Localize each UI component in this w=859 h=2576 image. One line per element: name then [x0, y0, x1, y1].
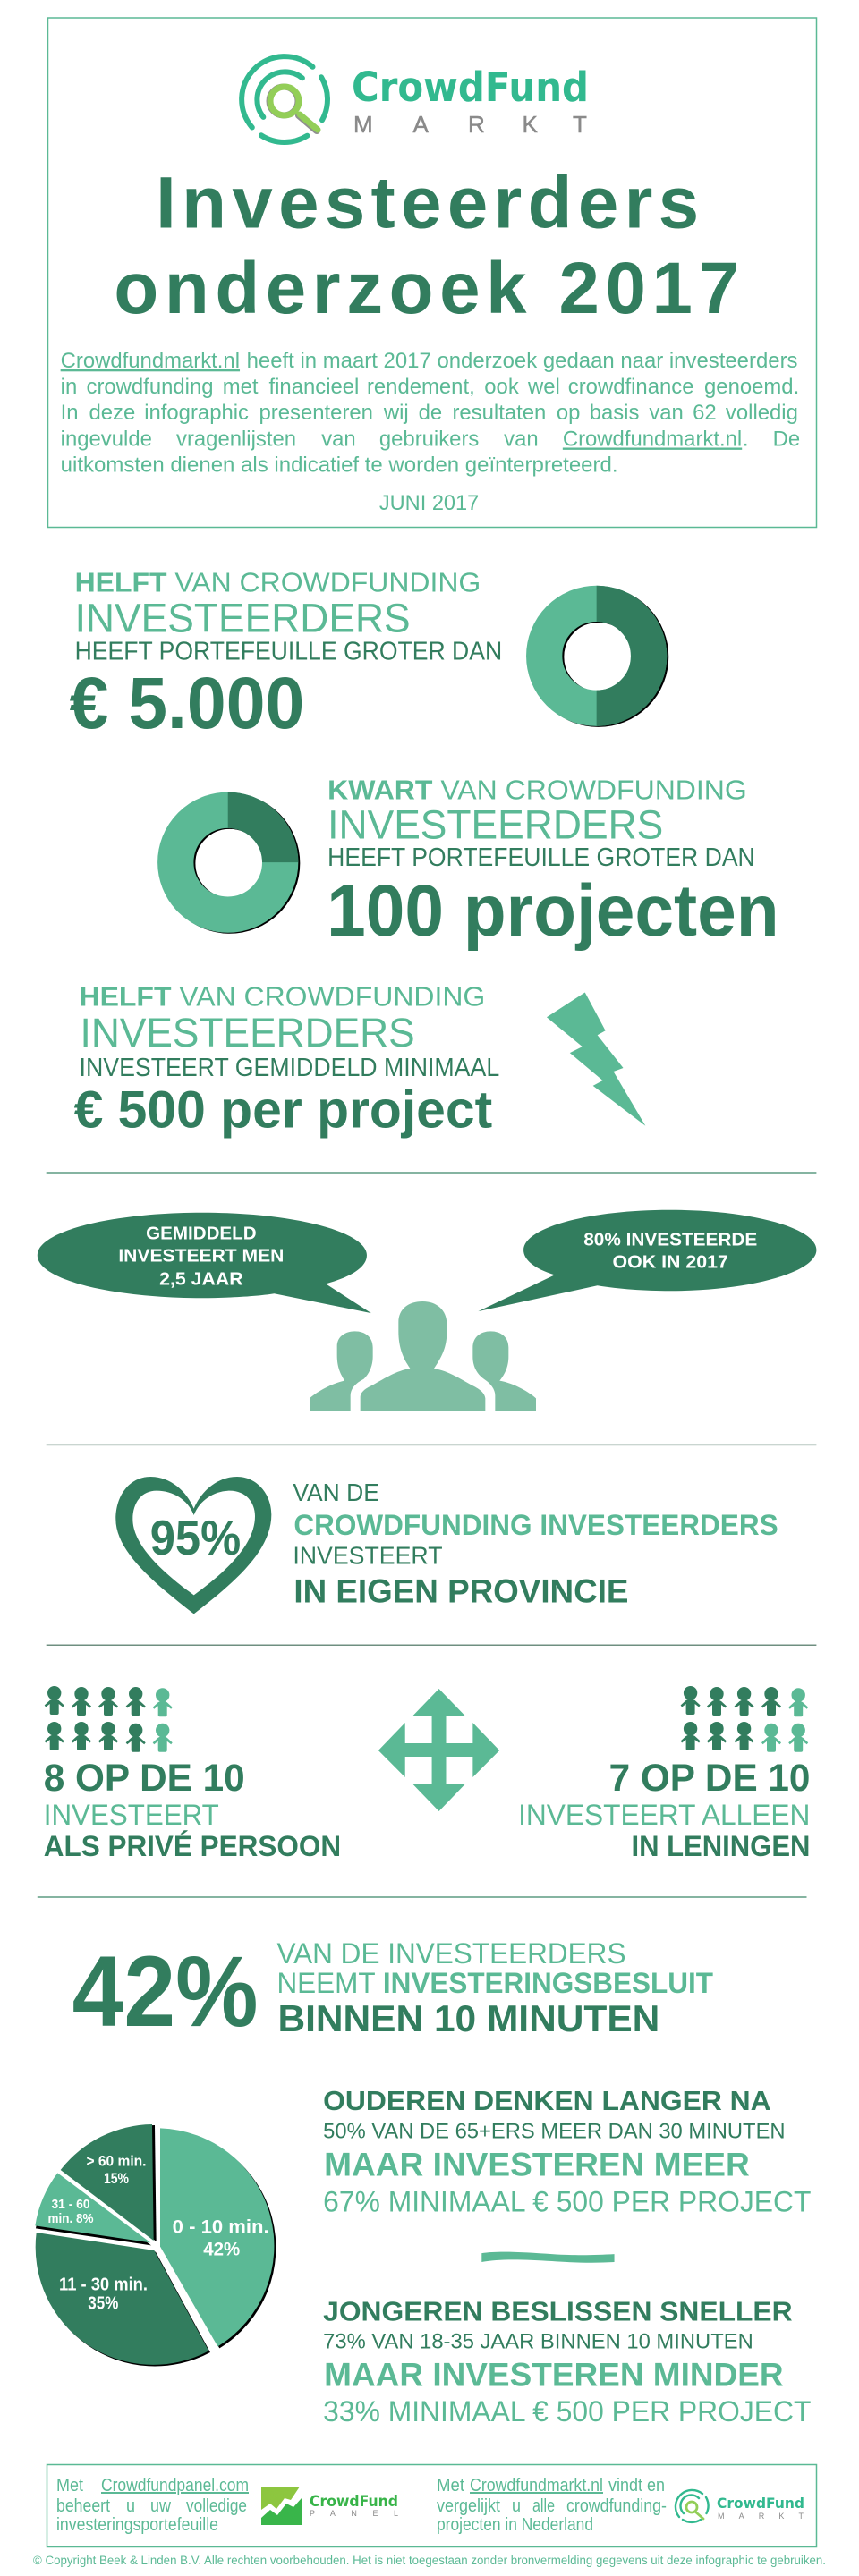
logo: CrowdFund Panel: [261, 2487, 398, 2525]
slice label 31-60: 31 - 60: [52, 2197, 89, 2212]
percentage: 95%: [150, 1510, 241, 1565]
panel: 500 per project: [74, 980, 645, 1140]
panel: loans: [518, 1686, 810, 1862]
heading: INVESTEERT GEMIDDELD MINIMAAL: [80, 1054, 499, 1082]
text block: CROWDFUNDING INVESTEERDERS: [293, 1508, 778, 1541]
text block: [293, 1479, 778, 1610]
text block: younger investors: [323, 2296, 811, 2428]
speech bubble right: 80% INVESTEERDE: [583, 1231, 757, 1250]
text block: older investors: MAAR INVESTEREN MEER: [324, 2147, 750, 2183]
heading: INVESTEERDERS: [81, 1010, 415, 1055]
logo: CrowdFund Markt small: MARKT: [718, 2512, 804, 2521]
intro text: wel: [527, 375, 560, 399]
intro text: Crowdfundmarkt.nl: [563, 427, 742, 451]
intro text: gebruikers: [379, 427, 479, 451]
text: crowdfundpanel: [56, 2476, 249, 2535]
big number: 100 projecten: [327, 870, 779, 952]
stat text: INVESTEERT ALLEEN: [518, 1799, 810, 1831]
intro text: [61, 349, 800, 477]
intro text: infographic: [144, 401, 249, 425]
date: JUNI 2017: [379, 491, 479, 515]
logo: CrowdFund Markt: [242, 56, 589, 142]
intro text: crowdfunding: [87, 375, 214, 399]
heading: HEEFT PORTEFEUILLE GROTER DAN: [327, 843, 755, 872]
slice label 31-60: [48, 2197, 93, 2226]
heading: INVESTEERDERS: [75, 595, 411, 640]
slice label 11-30: [59, 2275, 148, 2314]
stat text: [44, 1757, 341, 1862]
text: crowdfundmarkt: [437, 2476, 667, 2535]
icon: heart: [115, 1477, 271, 1614]
intro text: uitkomsten dienen als indicatief te worden geïnterpreteerd.: [61, 453, 618, 477]
intro text: deze: [89, 401, 135, 425]
stat text: 8 OP DE 10: [44, 1757, 245, 1800]
text block: younger investors: MAAR INVESTEREN MINDER: [324, 2356, 784, 2393]
icon: lightning bolt: [547, 992, 645, 1126]
stat text: IN LENINGEN: [631, 1830, 810, 1862]
text: crowdfundmarkt: alle: [532, 2496, 555, 2516]
speech bubble left: INVESTEERT MEN: [118, 1246, 284, 1266]
intro text: volledig: [726, 401, 798, 425]
intro text: vragenlijsten: [176, 427, 296, 451]
intro text: financieel: [268, 375, 359, 399]
speech bubble left: [38, 1213, 371, 1313]
slice label over 60: 15%: [104, 2171, 129, 2187]
heading: KWART VAN CROWDFUNDING: [327, 775, 747, 806]
heading: HEEFT PORTEFEUILLE GROTER DAN: [75, 637, 502, 665]
wave divider: [481, 2252, 615, 2263]
big percentage: 42%: [72, 1936, 259, 2047]
icon: people 7 of 10: [681, 1686, 808, 1752]
text block: IN EIGEN PROVINCIE: [293, 1573, 628, 1610]
title: Investeerders: [156, 163, 699, 244]
slice label 0-10: 42%: [203, 2239, 240, 2260]
panel: portfolio 5000: [70, 567, 651, 744]
title: [114, 163, 739, 329]
slice label 31-60: min. 8%: [48, 2211, 93, 2226]
intro text: crowdfinance: [568, 375, 693, 399]
logo: CrowdFund Panel: PANEL: [310, 2509, 398, 2518]
intro text: op: [557, 401, 580, 425]
intro text: presenteren: [259, 401, 373, 425]
intro text: 62: [693, 401, 717, 425]
panel: footer: [47, 2465, 816, 2547]
logo: CrowdFund Markt: MARKT: [353, 111, 587, 138]
intro text: van: [649, 401, 684, 425]
intro text: van: [321, 427, 356, 451]
intro text: De: [773, 427, 800, 451]
intro text: met: [223, 375, 259, 399]
intro text: .: [743, 427, 748, 451]
text: crowdfundmarkt: vindt en: [608, 2476, 665, 2496]
big amount: € 5.000: [70, 663, 304, 744]
text: crowdfundpanel: investeringsportefeuille: [56, 2515, 218, 2535]
panel: header: [48, 18, 816, 528]
logo: CrowdFund Markt small: CrowdFund: [717, 2495, 804, 2512]
text block: younger investors: 33% MINIMAAL € 500 PER PROJECT: [323, 2394, 811, 2428]
heading: HELFT VAN CROWDFUNDING: [75, 567, 481, 598]
stat text: [518, 1757, 810, 1862]
panel: own province: [115, 1477, 778, 1614]
intro text: heeft in maart 2017 onderzoek gedaan naar investeerders: [247, 349, 798, 373]
panel: decision time: [72, 1936, 713, 2047]
text: crowdfundpanel: beheert: [56, 2496, 110, 2516]
heading: [327, 775, 755, 872]
intro text: rendement,: [367, 375, 475, 399]
intro text: wij: [383, 401, 409, 425]
text: crowdfundmarkt: vergelijkt: [437, 2496, 500, 2516]
text: crowdfundpanel: Crowdfundpanel.com: [101, 2476, 249, 2496]
heading: INVESTEERDERS: [327, 801, 663, 847]
intro text: basis: [590, 401, 639, 425]
intro text: in: [61, 375, 77, 399]
intro text: genoemd.: [704, 375, 799, 399]
slice label over 60: [86, 2154, 147, 2187]
text block: NEEMT INVESTERINGSBESLUIT: [276, 1967, 713, 1999]
slice label 11-30: 35%: [88, 2294, 118, 2314]
speech bubble left: GEMIDDELD: [146, 1224, 257, 1244]
intro text: de: [419, 401, 442, 425]
title: onderzoek 2017: [114, 248, 739, 329]
text block: older investors: [323, 2085, 811, 2217]
text: crowdfundmarkt: u: [512, 2496, 521, 2516]
panel: private persons: [44, 1686, 341, 1862]
logo: CrowdFund Panel: CrowdFund: [310, 2493, 398, 2511]
slice label 11-30: 11 - 30 min.: [59, 2275, 148, 2295]
text: crowdfundmarkt: Crowdfundmarkt.nl: [470, 2476, 603, 2496]
text: crowdfundpanel: volledige: [186, 2496, 247, 2516]
text block: older investors: OUDEREN DENKEN LANGER NA: [323, 2085, 771, 2116]
intro text: resultaten: [452, 401, 546, 425]
intro text: Crowdfundmarkt.nl: [61, 349, 240, 373]
speech bubble right: [478, 1210, 816, 1311]
text: crowdfundmarkt: Met: [437, 2476, 464, 2496]
donut chart quarter: [175, 810, 282, 916]
intro text: In: [61, 401, 79, 425]
stat text: INVESTEERT: [44, 1799, 219, 1831]
icon: people 8 of 10: [45, 1686, 173, 1752]
text: crowdfundmarkt: projecten in Nederland: [437, 2515, 593, 2535]
text block: [276, 1937, 713, 2039]
text: crowdfundpanel: u: [126, 2496, 135, 2516]
text block: younger investors: 73% VAN 18-35 JAAR BINNEN 10 MINUTEN: [323, 2330, 753, 2354]
text: crowdfundmarkt: crowdfunding-: [566, 2496, 667, 2516]
panel: investing duration: [38, 1210, 816, 1411]
big amount: € 500 per project: [74, 1081, 492, 1140]
pie chart: [35, 2124, 276, 2367]
slice label over 60: > 60 min.: [86, 2154, 147, 2170]
stat text: 7 OP DE 10: [609, 1757, 810, 1800]
text: crowdfundpanel: uw: [150, 2496, 171, 2516]
heading: [80, 980, 499, 1082]
donut chart half: [544, 604, 651, 709]
logo: CrowdFund Markt small: [676, 2490, 804, 2522]
speech bubble right: OOK IN 2017: [613, 1252, 728, 1272]
text block: older investors: 50% VAN DE 65+ERS MEER DAN 30 MINUTEN: [323, 2120, 786, 2144]
icon: four-way arrow: [378, 1689, 499, 1811]
text: crowdfundpanel: Met: [56, 2476, 83, 2496]
icon: group of people: [310, 1301, 536, 1411]
intro text: van: [504, 427, 539, 451]
logo: CrowdFund Markt: CrowdFund: [352, 64, 589, 111]
heading: HELFT VAN CROWDFUNDING: [80, 980, 485, 1012]
text block: BINNEN 10 MINUTEN: [277, 1997, 659, 2039]
text block: INVESTEERT: [293, 1542, 443, 1570]
slice label 0-10: [173, 2216, 269, 2260]
heading: [75, 567, 502, 665]
intro text: ingevulde: [61, 427, 152, 451]
text block: VAN DE: [293, 1479, 379, 1506]
slice label 0-10: 0 - 10 min.: [173, 2216, 269, 2238]
text block: older investors: 67% MINIMAAL € 500 PER PROJECT: [323, 2184, 811, 2217]
speech bubble left: 2,5 JAAR: [159, 1269, 243, 1289]
intro text: ook: [484, 375, 519, 399]
copyright: © Copyright Beek & Linden B.V. Alle rechten voorbehouden. Het is niet toegestaan zonder bronvermelding gegevens uit deze infographic te gebruiken.: [33, 2554, 826, 2567]
stat text: ALS PRIVÉ PERSOON: [44, 1830, 341, 1862]
text block: younger investors: JONGEREN BESLISSEN SNELLER: [323, 2296, 793, 2327]
text block: VAN DE INVESTEERDERS: [276, 1937, 625, 1970]
panel: portfolio 100 projects: [175, 775, 779, 952]
